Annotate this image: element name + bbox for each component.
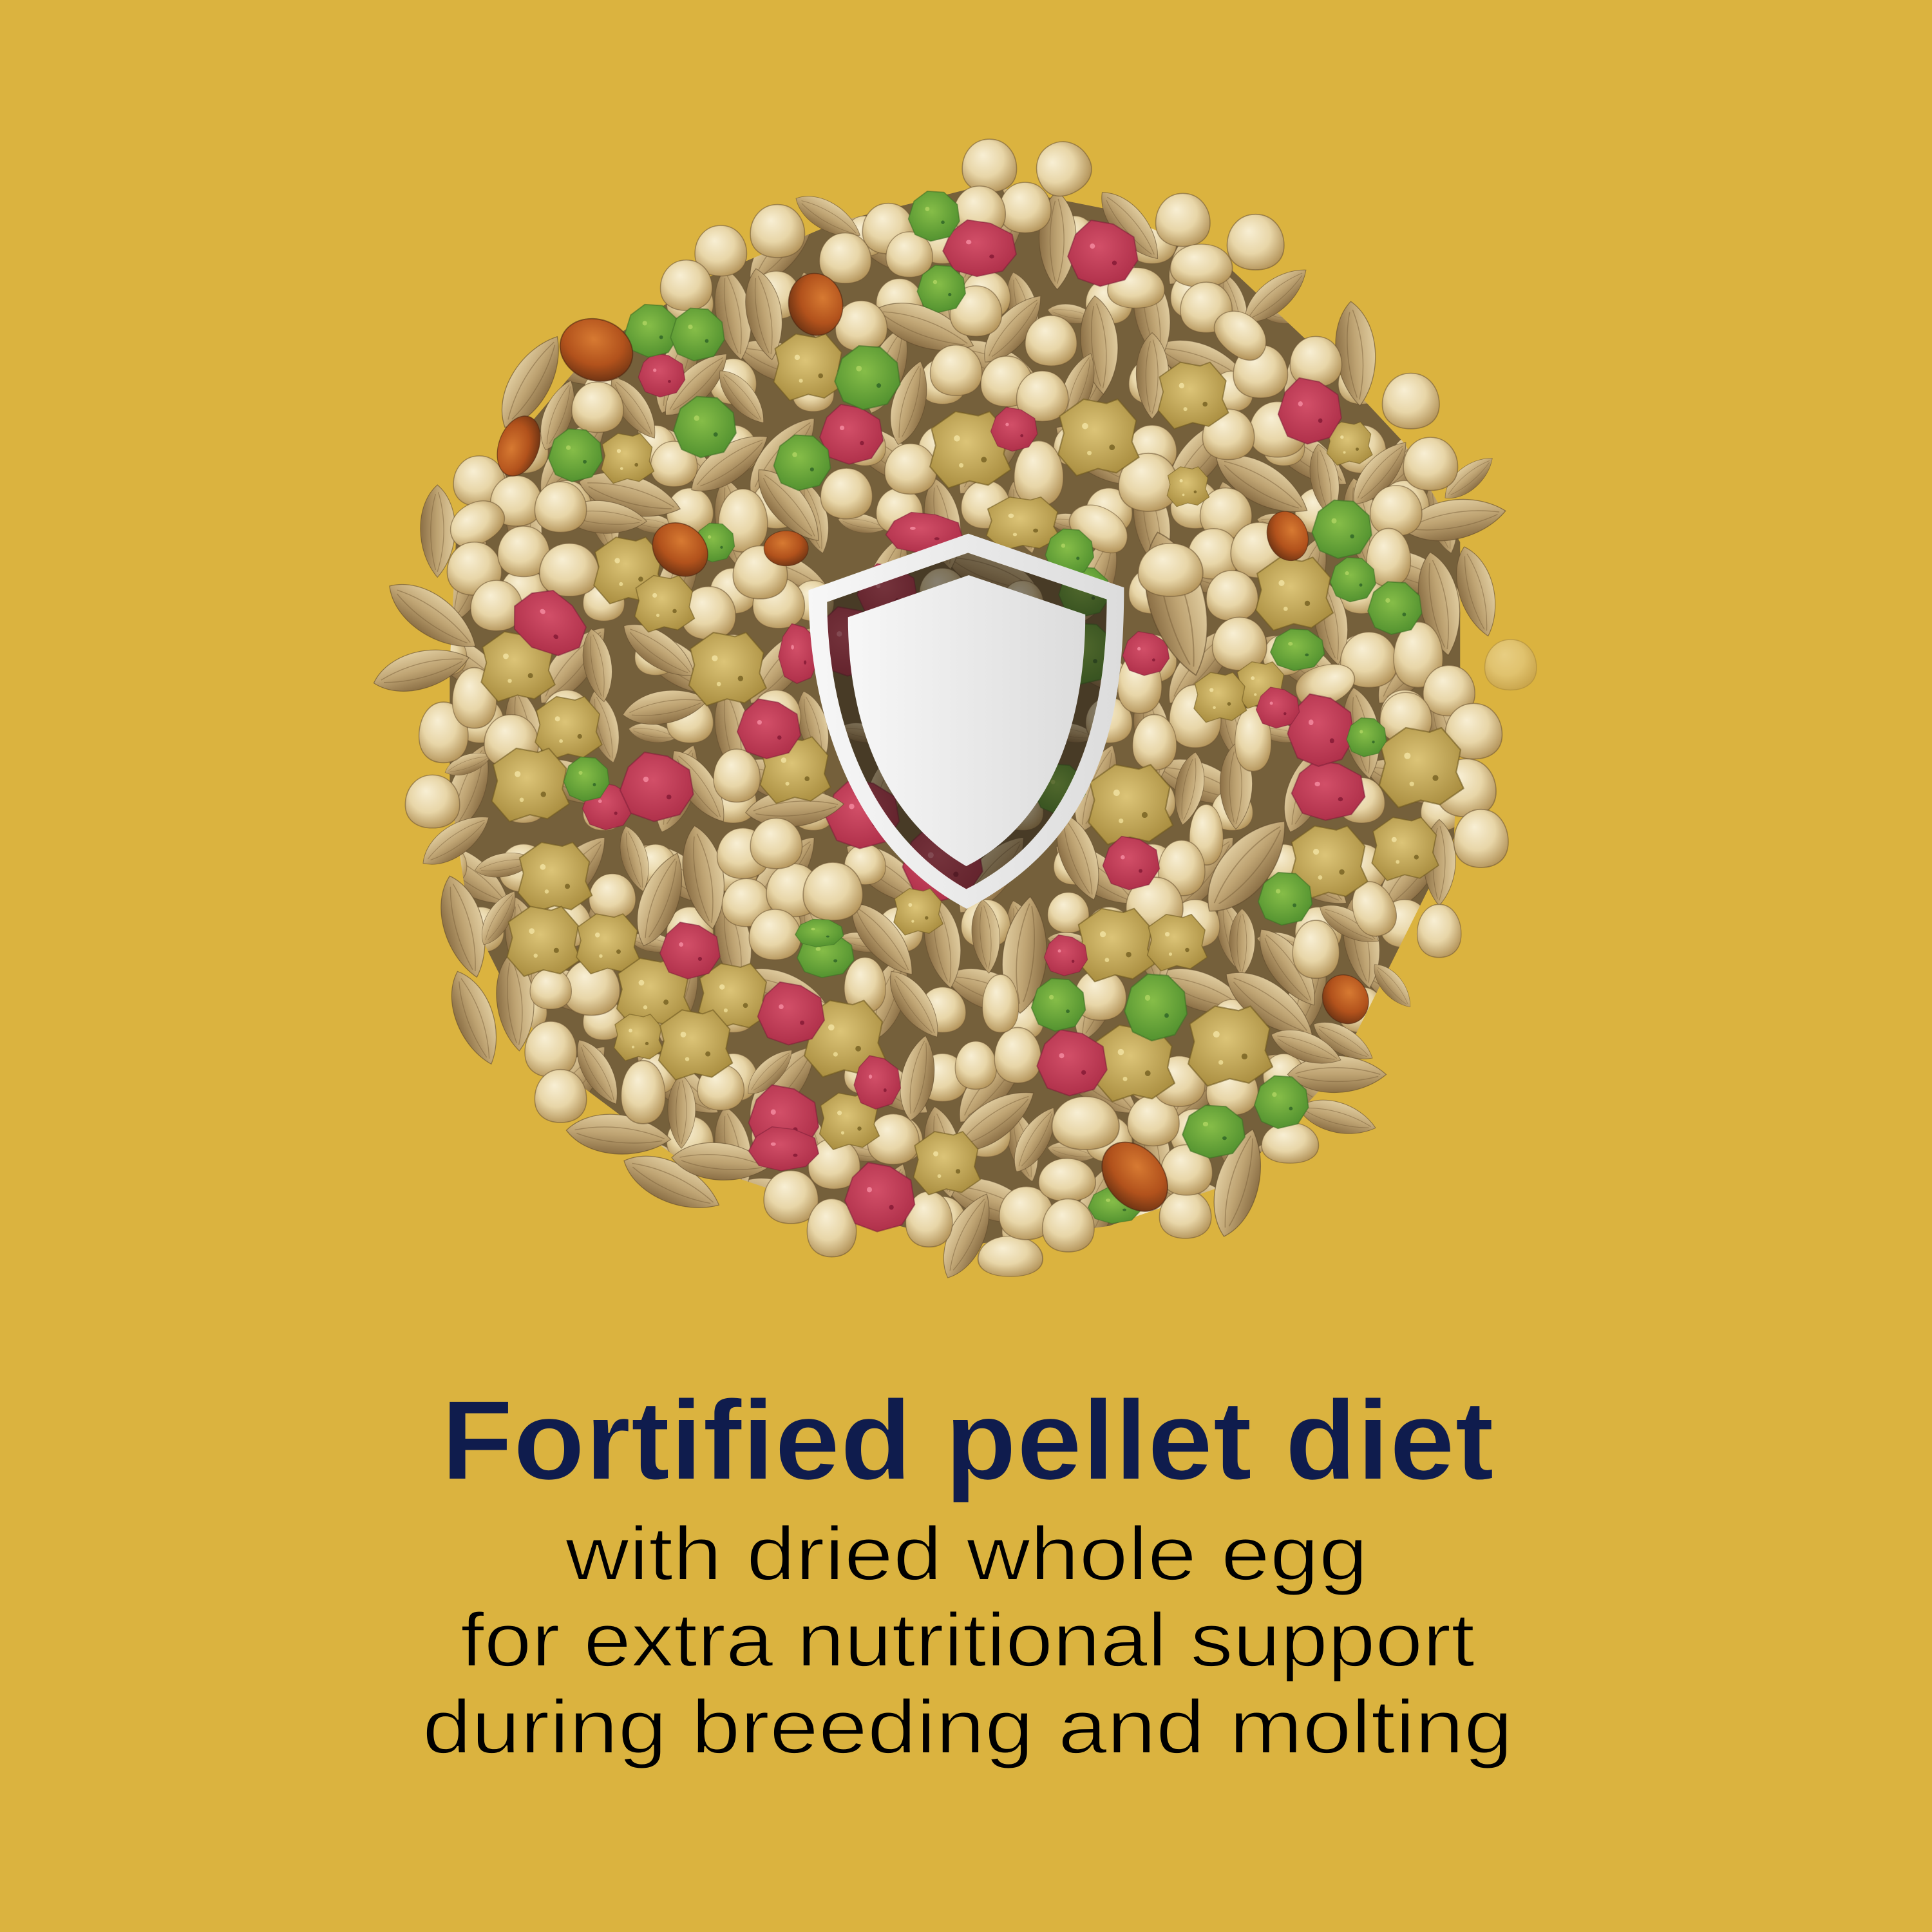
millet: [962, 139, 1017, 192]
husks: [789, 186, 867, 247]
seeds beneath shield: [1053, 623, 1115, 684]
title: Fortified pellet diet: [441, 1378, 1494, 1504]
subtitle line 1: with dried whole egg: [565, 1511, 1368, 1596]
pale loose seed: [1485, 639, 1537, 690]
subtitle line 3: during breeding and molting: [422, 1685, 1513, 1770]
seed and pellet pile: [369, 131, 1537, 1285]
subtitle line 2: for extra nutritional support: [460, 1598, 1475, 1683]
shield core: [848, 575, 1085, 866]
red pellets: [943, 220, 1016, 276]
green pellets: [909, 191, 960, 241]
shield outer ring: [808, 534, 1124, 909]
crumble pellets: [1159, 363, 1229, 429]
shield dark inner band: [827, 553, 1107, 889]
large oats: [1132, 525, 1223, 682]
orange seeds: [551, 308, 641, 391]
shield icon: [808, 534, 1124, 909]
